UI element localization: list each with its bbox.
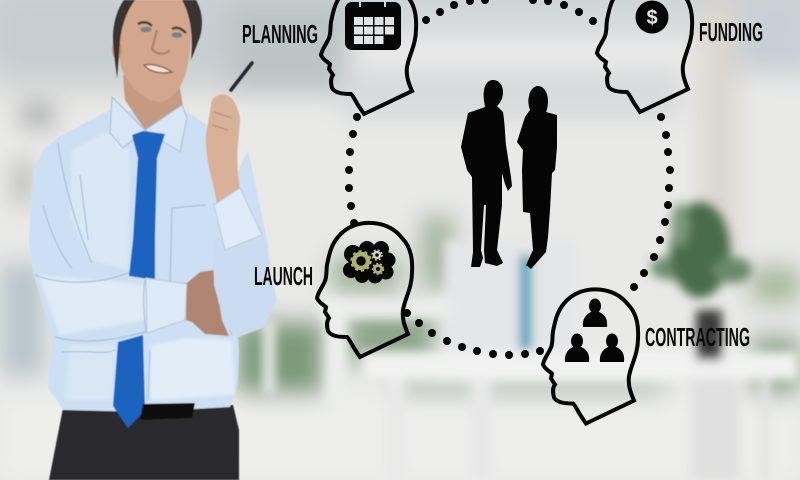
- icon: gears in cloud: [343, 241, 396, 284]
- raised hand: [206, 94, 240, 205]
- cuff: [214, 188, 262, 250]
- central silhouettes of two people: [461, 80, 557, 269]
- label: planning: PLANNING: [242, 19, 318, 49]
- crossed cuff: [146, 278, 187, 333]
- trousers: [49, 405, 239, 480]
- neck: [123, 75, 183, 130]
- nose: [152, 30, 170, 54]
- mouth: [144, 64, 172, 73]
- head: planning: [321, 0, 416, 114]
- face: [119, 0, 191, 102]
- belt: [140, 403, 195, 420]
- blurred desk, plant and window frames: [262, 202, 798, 480]
- upper arm sleeve: [213, 225, 277, 337]
- hair: [113, 0, 202, 79]
- shirt folds: [35, 143, 235, 400]
- ear: [112, 41, 122, 59]
- shirt body: [29, 110, 277, 412]
- fingers: [212, 112, 232, 130]
- pen: [231, 63, 252, 90]
- brows: [138, 22, 186, 33]
- icon: dollar coin: $: [646, 7, 658, 29]
- head: funding: [597, 0, 692, 112]
- businessman thinking with pen: [29, 0, 277, 480]
- tie upper: [129, 131, 165, 280]
- tie lower: [113, 335, 145, 428]
- icon: three people: [565, 298, 624, 362]
- eye left: [140, 27, 152, 32]
- shirt highlights: [38, 130, 235, 400]
- icon: calendar: [345, 0, 401, 50]
- head: launch: [317, 223, 412, 357]
- hidden hand: [186, 270, 229, 336]
- collar: [110, 97, 187, 152]
- eye right: [172, 32, 182, 38]
- silhouette: man: [461, 80, 512, 267]
- label: launch: LAUNCH: [254, 261, 313, 291]
- dotted cycle ring: [345, 0, 674, 359]
- silhouette: woman: [517, 86, 557, 269]
- head: contracting: [543, 289, 638, 424]
